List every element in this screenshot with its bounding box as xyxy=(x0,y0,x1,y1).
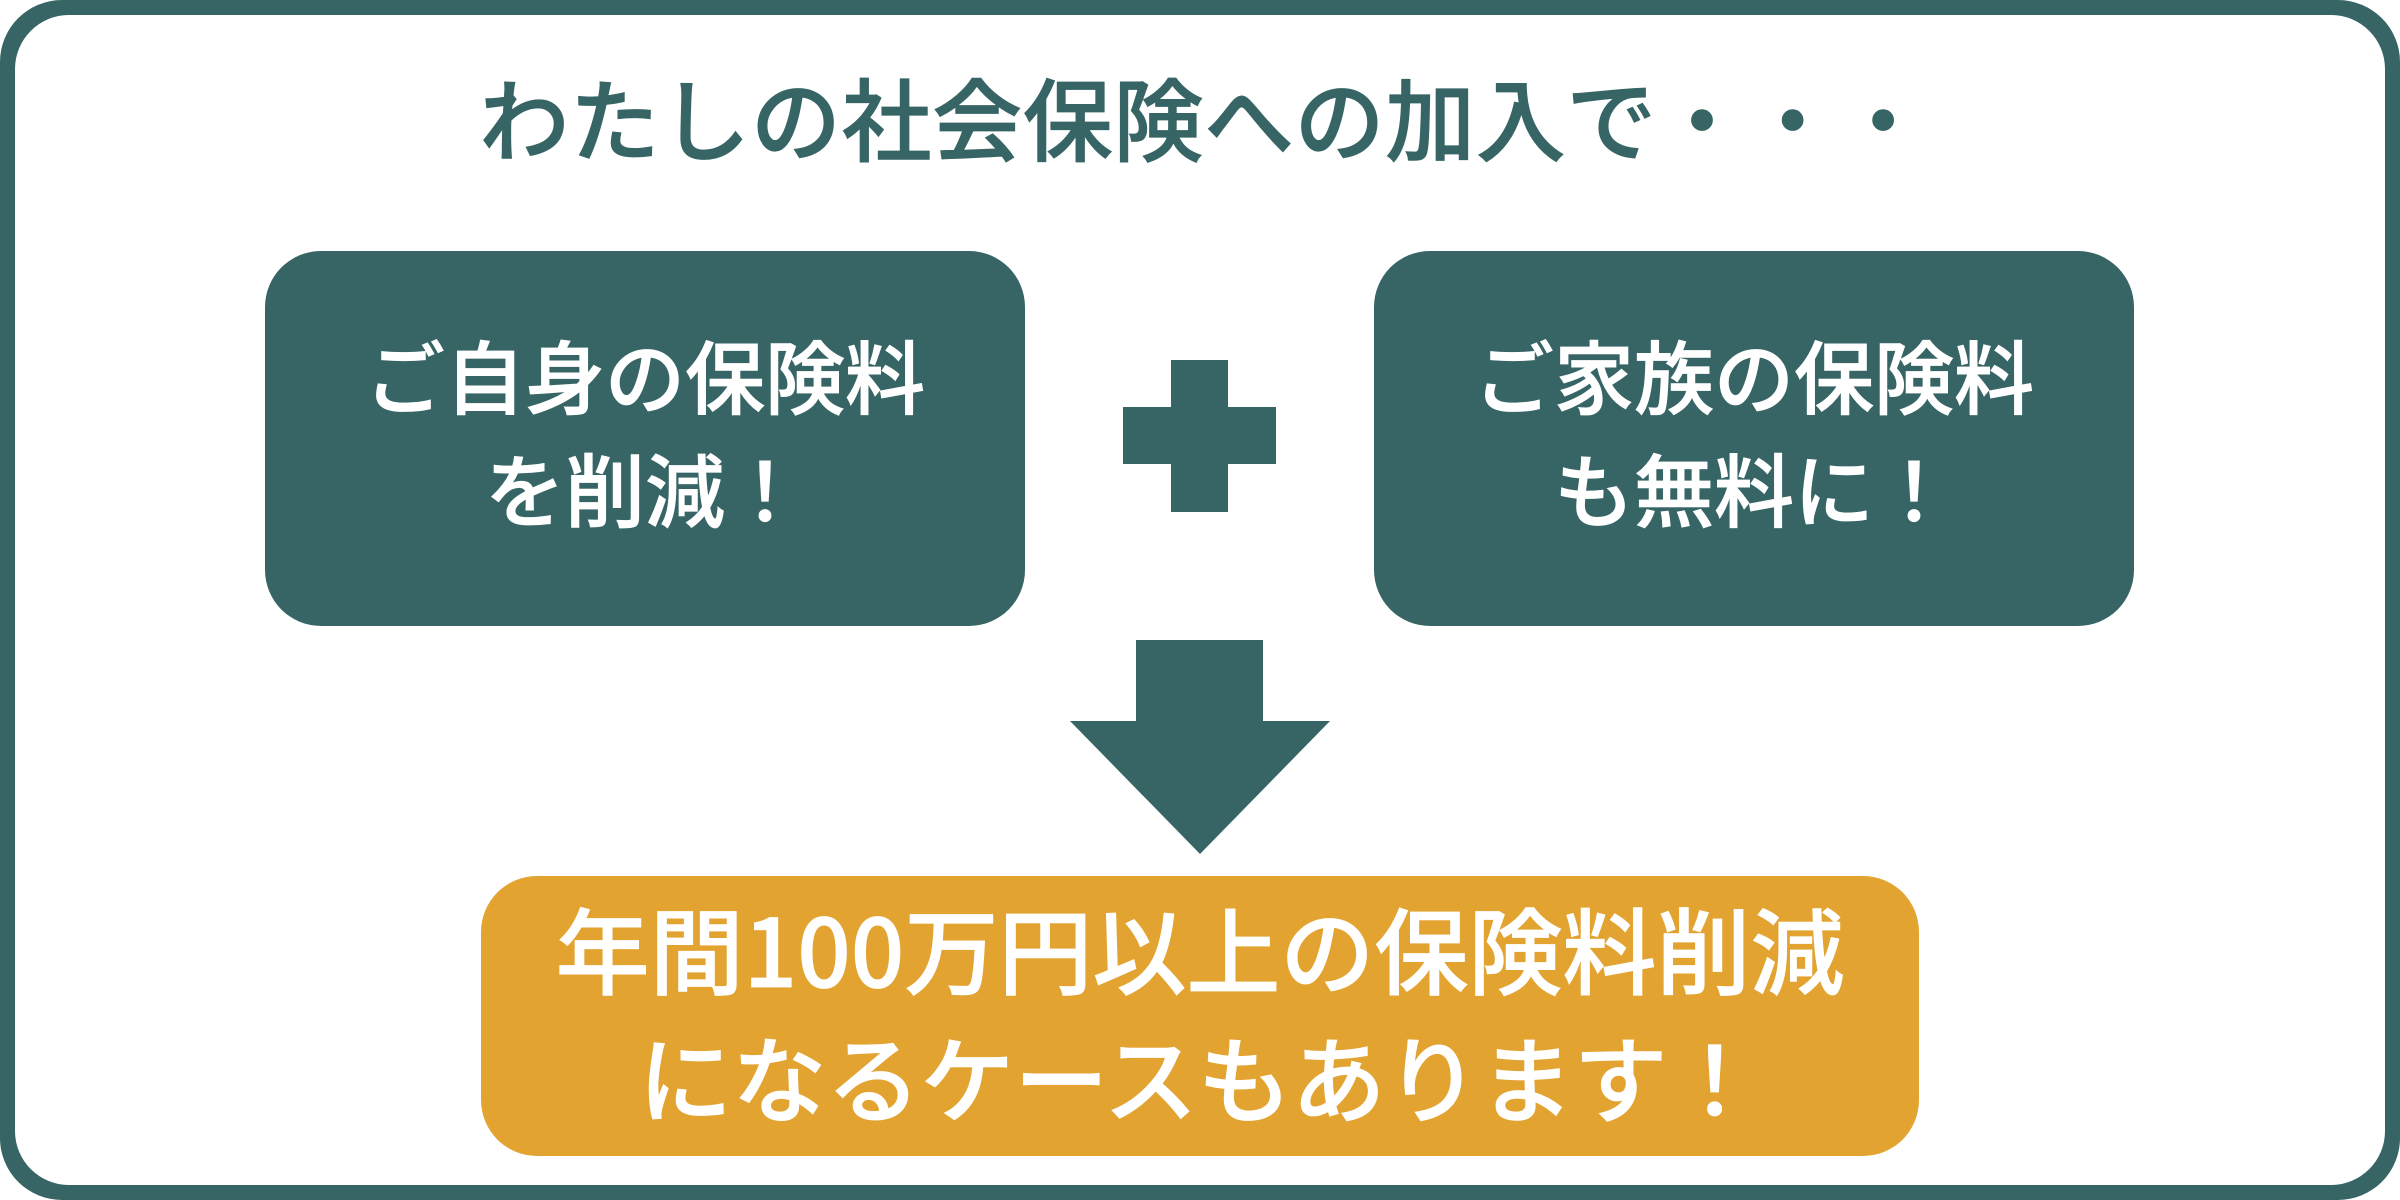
arrow: down xyxy=(1070,640,1330,854)
panel: own premium xyxy=(265,251,1025,626)
panel text: own premium xyxy=(365,316,925,545)
panel text: own premium: ご自身の保険料 xyxy=(365,316,925,432)
panel: result callout xyxy=(481,876,1919,1156)
callout text: になるケースもあります！ xyxy=(638,1007,1762,1143)
title: わたしの社会保険への加入で・・・ xyxy=(479,50,1929,180)
callout text: 年間100万円以上の保険料削減 xyxy=(556,879,1844,1015)
callout text xyxy=(556,879,1844,1143)
panel: family premium xyxy=(1374,251,2134,626)
icon: plus sign xyxy=(1123,360,1276,512)
panel text: own premium: を削減！ xyxy=(485,429,805,545)
panel text: family premium: ご家族の保険料 xyxy=(1474,316,2034,432)
panel text: family premium xyxy=(1474,316,2034,545)
panel text: family premium: も無料に！ xyxy=(1554,429,1954,545)
